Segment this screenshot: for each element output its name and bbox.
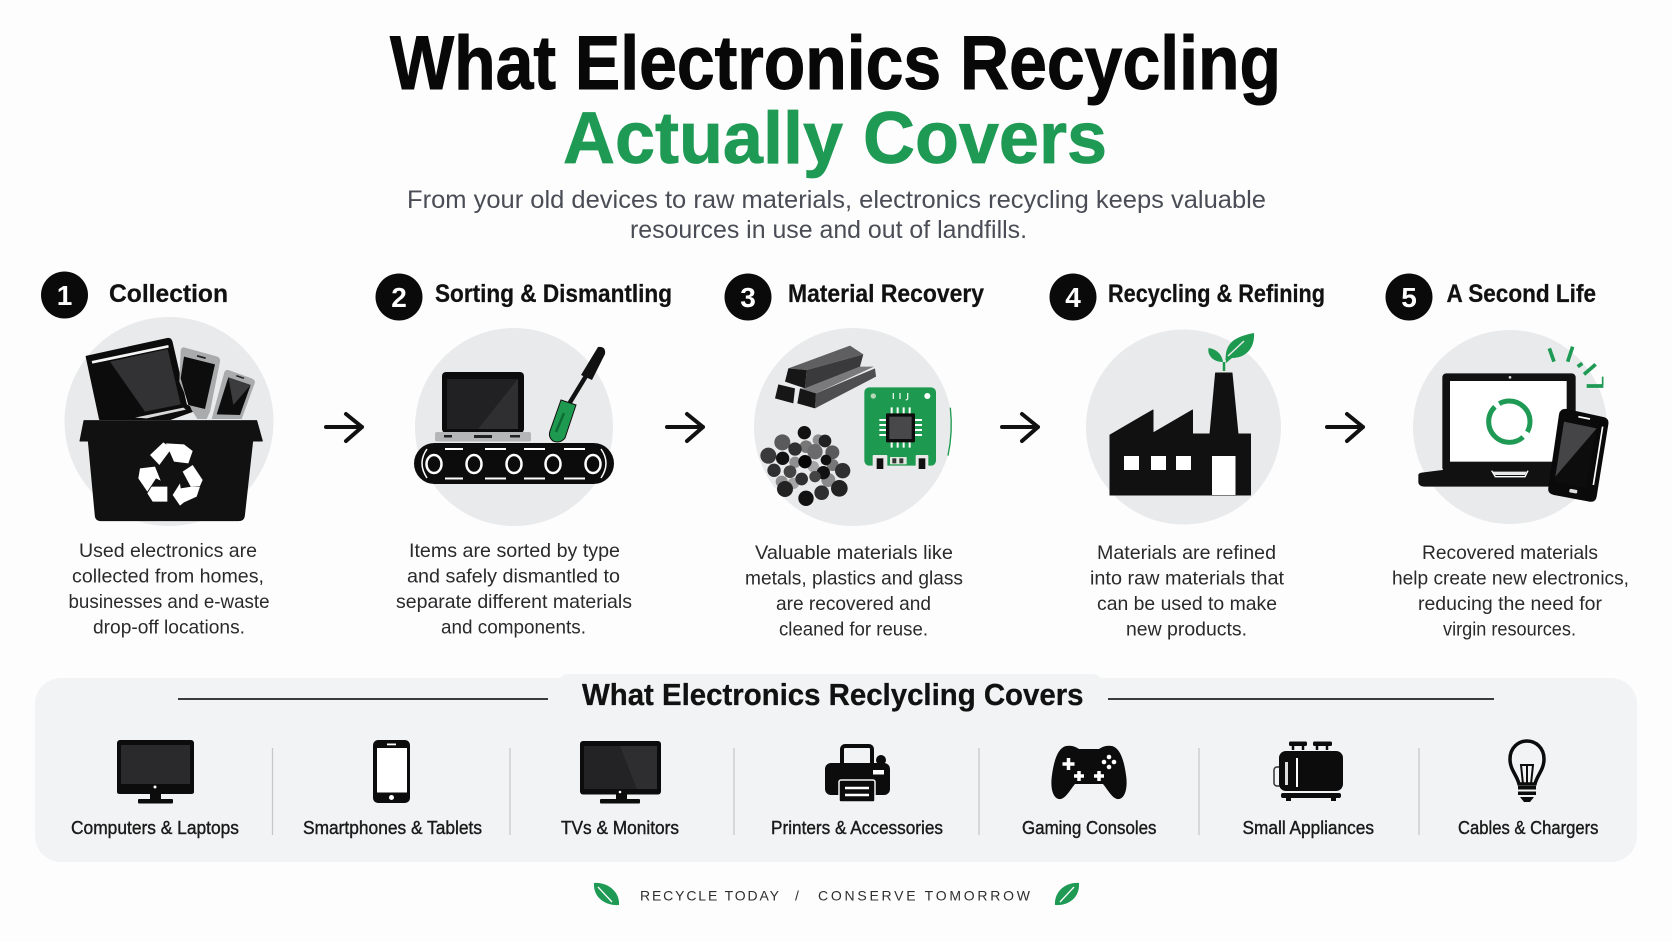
icon: right leaf xyxy=(1055,883,1079,905)
footer tagline: RECYCLE TODAY xyxy=(640,888,780,904)
description 3: are recovered and xyxy=(776,593,931,615)
badge 2: 2 xyxy=(391,282,407,313)
badge 5 xyxy=(1386,274,1432,320)
description 3: cleaned for reuse. xyxy=(779,618,928,640)
badge 4: 4 xyxy=(1065,282,1081,313)
item: computers and laptops xyxy=(71,740,239,838)
description 2: Items are sorted by type xyxy=(409,540,620,562)
heading: material recovery: Material Recovery xyxy=(788,280,984,308)
badge 5: 5 xyxy=(1401,282,1417,313)
step 1: collection xyxy=(41,272,274,638)
description 4: can be used to make xyxy=(1097,593,1277,615)
panel: what electronics recycling covers xyxy=(35,674,1637,862)
subtitle: From your old devices to raw materials, electronics recycling keeps valuable xyxy=(407,186,1266,214)
step 4: recycling and refining xyxy=(1050,274,1325,640)
item: gaming consoles: Gaming Consoles xyxy=(1022,817,1156,838)
badge 3 xyxy=(724,274,772,320)
description 4: into raw materials that xyxy=(1090,568,1285,590)
item: smartphones and tablets: Smartphones & Tablets xyxy=(303,817,482,838)
panel heading: What Electronics Reclycling Covers xyxy=(582,677,1084,712)
item: computers and laptops: Computers & Laptops xyxy=(71,817,239,838)
item: tvs and monitors: TVs & Monitors xyxy=(561,817,679,838)
arrow 2 xyxy=(667,414,703,441)
title xyxy=(390,21,1281,179)
heading: recycling and refining: Recycling & Refining xyxy=(1108,280,1325,308)
subtitle: resources in use and out of landfills. xyxy=(630,216,1027,244)
description 5: reducing the need for xyxy=(1418,593,1602,615)
description 1: drop-off locations. xyxy=(93,616,245,638)
footer tagline: CONSERVE TOMORROW xyxy=(818,888,1031,904)
footer tagline xyxy=(594,883,1079,905)
description 4: Materials are refined xyxy=(1097,542,1276,564)
icon: left leaf xyxy=(594,883,619,905)
description 5: help create new electronics, xyxy=(1392,568,1629,590)
item: small appliances: Small Appliances xyxy=(1242,817,1374,838)
item: printers and accessories xyxy=(771,746,943,838)
description 1 xyxy=(68,540,270,638)
badge 2 xyxy=(376,274,422,320)
heading: a second life: A Second Life xyxy=(1446,280,1596,308)
description 4 xyxy=(1090,542,1285,640)
subtitle xyxy=(407,186,1266,244)
arrow 4 xyxy=(1327,414,1363,441)
description 3 xyxy=(745,542,963,640)
step 2: sorting and dismantling xyxy=(376,274,672,638)
item: small appliances xyxy=(1242,742,1374,838)
description 2: and safely dismantled to xyxy=(407,566,620,588)
item: cables and chargers: Cables & Chargers xyxy=(1458,817,1598,838)
description 4: new products. xyxy=(1126,618,1247,640)
item: tvs and monitors xyxy=(561,741,679,838)
arrow 1 xyxy=(326,414,362,441)
description 3: metals, plastics and glass xyxy=(745,568,963,590)
footer tagline: / xyxy=(795,888,799,904)
step 5: a second life xyxy=(1386,274,1629,640)
description 5: Recovered materials xyxy=(1422,542,1598,564)
description 2: separate different materials xyxy=(396,591,632,613)
description 1: businesses and e-waste xyxy=(68,591,270,613)
heading: collection: Collection xyxy=(109,280,228,308)
description 5: virgin resources. xyxy=(1443,618,1576,640)
badge 4 xyxy=(1050,274,1096,320)
description 2: and components. xyxy=(441,616,586,638)
badge 1 xyxy=(41,272,88,318)
title: Actually Covers xyxy=(563,98,1107,179)
description 1: collected from homes, xyxy=(72,566,264,588)
title: What Electronics Recycling xyxy=(390,21,1281,106)
description 3: Valuable materials like xyxy=(755,542,953,564)
item: smartphones and tablets xyxy=(303,740,482,838)
icon: bin of devices xyxy=(64,317,274,526)
description 5 xyxy=(1392,542,1629,640)
badge 1: 1 xyxy=(57,280,72,311)
description 1: Used electronics are xyxy=(79,540,257,562)
arrow 3 xyxy=(1002,414,1038,441)
step 3: material recovery xyxy=(724,274,984,640)
description 2 xyxy=(396,540,632,638)
icon: factory with leaf xyxy=(1086,330,1281,524)
icon: laptop on conveyor with screwdriver xyxy=(414,328,614,526)
icon: renewed laptop and phone xyxy=(1413,330,1608,524)
badge 3: 3 xyxy=(740,282,756,313)
item: gaming consoles xyxy=(1022,746,1156,838)
item: printers and accessories: Printers & Accessories xyxy=(771,817,943,838)
heading: sorting: Sorting & Dismantling xyxy=(435,280,672,308)
item: cables and chargers xyxy=(1458,741,1598,838)
icon: metals, pellets and circuit board xyxy=(754,328,952,526)
